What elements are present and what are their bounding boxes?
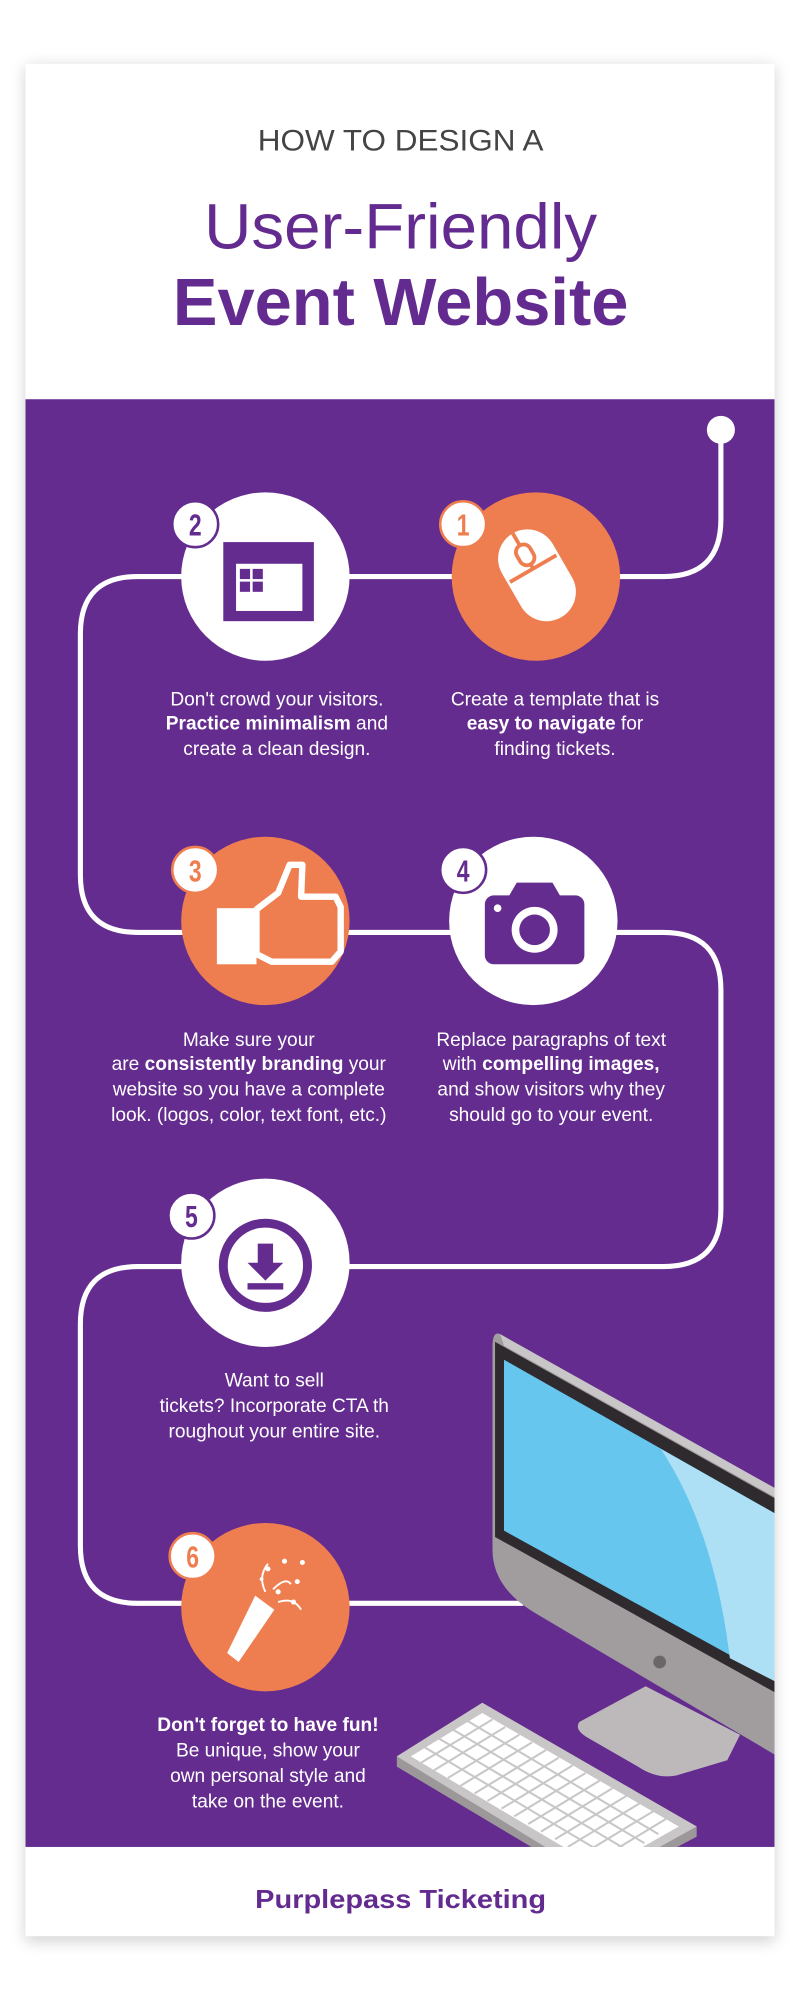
text 3: website so you have a complete [112,1080,385,1101]
text 3: are consistently branding your [112,1054,386,1075]
monitor illustration [396,1334,774,1847]
text 5: Want to sell [225,1370,324,1391]
badge 6: 6 [186,1540,199,1574]
title: main line 1: User-Friendly [204,191,597,263]
step 6 [157,1523,379,1812]
text 4: with compelling images, [443,1054,660,1075]
badge 5 [168,1193,214,1239]
badge 1: 1 [457,509,470,543]
icon: camera [485,883,584,964]
purple panel [26,399,800,1888]
start dot [707,416,735,444]
badge 2: 2 [189,509,202,543]
text 2: Practice minimalism and [166,714,388,735]
text 6: Don't forget to have fun! [157,1715,379,1736]
text 6: take on the event. [192,1791,344,1812]
text 4: and show visitors why they [437,1080,665,1101]
text 6: Be unique, show your [176,1740,361,1761]
badge 4: 4 [457,854,470,888]
badge 6 [170,1533,216,1579]
step 4 [436,837,667,1126]
text 2: Don't crowd your visitors. [170,689,383,710]
badge 4 [440,847,486,893]
text 5: roughout your entire site. [169,1422,380,1442]
icon: party popper [227,1559,305,1662]
text 6: own personal style and [170,1766,366,1787]
text 1: Create a template that is [451,689,659,710]
text 5: tickets? Incorporate CTA th [160,1396,389,1417]
icon: thumbs up [217,865,341,964]
icon: download [223,1223,307,1307]
path line [80,430,721,1603]
step 2 [166,492,388,760]
text 3: look. (logos, color, text font, etc.) [111,1105,386,1126]
screen [504,1360,774,1655]
icon: mouse [487,519,587,632]
title: main line 2: Event Website [173,266,628,340]
body [492,1334,774,1754]
badge 3: 3 [189,854,202,888]
badge 3 [172,847,218,893]
text 2: create a clean design. [183,739,370,760]
step 5 [160,1179,389,1442]
step 1 [440,492,659,760]
text 4: Replace paragraphs of text [436,1030,667,1051]
text 1: finding tickets. [494,739,616,760]
step 3 [111,837,387,1126]
text 3: Make sure your [183,1030,315,1051]
keyboard [396,1702,697,1847]
badge 5: 5 [185,1200,198,1234]
text 4: should go to your event. [449,1105,653,1126]
title: kicker: HOW TO DESIGN A [258,125,544,158]
text 1: easy to navigate for [467,714,643,735]
stand [578,1686,740,1776]
footer: Purplepass Ticketing [255,1886,546,1914]
icon: window [223,542,314,621]
badge 1 [440,501,486,547]
bezel [495,1342,774,1692]
badge 2 [172,501,218,547]
